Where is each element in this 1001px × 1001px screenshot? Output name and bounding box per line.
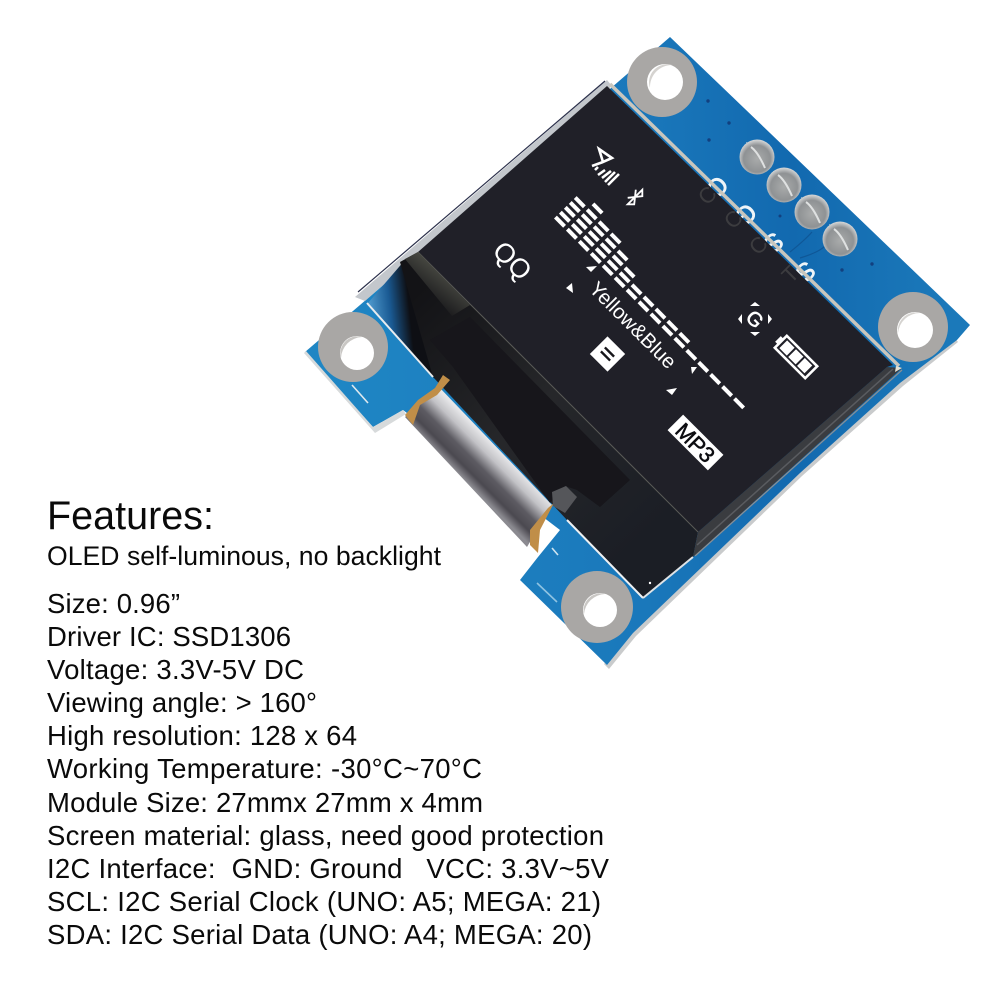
glass panel [355,80,902,598]
metal cylinder [405,375,577,553]
screen content [487,149,817,472]
heading: Features: Features: [47,494,214,538]
specification list: SDA: I2C Serial Data (UNO: A4; MEGA: 20) [47,919,592,950]
specification list: SCL: I2C Serial Clock (UNO: A5; MEGA: 21) [47,886,601,917]
mounting hole: bottom [561,571,633,643]
specification list: Working Temperature: -30°C~70°C [47,753,482,784]
icon: bluetooth [624,186,646,208]
specification list [47,588,610,950]
specification list: High resolution: 128 x 64 [47,720,357,751]
corner marks around title [566,266,697,395]
specification list: I2C Interface: GND: Ground VCC: 3.3V~5V [47,853,610,884]
MP3 badge: MP3 [670,418,720,468]
specification list: Screen material: glass, need good protection [47,820,604,851]
QQ label: QQ [487,235,538,286]
mounting hole: right [878,292,948,362]
subheading: OLED self-luminous, no backlight [47,541,442,571]
board pin labels: S [789,255,821,287]
specification list: Size: 0.96” [47,588,180,619]
board pin labels: G [729,198,762,231]
reflected pin labels on glass: C [693,181,722,210]
icon: battery [772,333,817,378]
board pin labels: C [701,170,734,203]
flex cable block [430,317,630,507]
reflected pin labels on glass [693,181,804,288]
icon: G badge: G [741,306,768,333]
icon: pause [590,336,625,372]
board pin labels: S [757,226,789,258]
reflected pin labels on glass: C [744,231,773,260]
header pin solder joints [740,140,858,256]
equalizer bars [554,190,771,409]
photo: OLED display module [304,37,970,669]
mounting hole: left [318,312,388,382]
mounting hole: top [627,47,697,117]
board pin labels [701,170,821,287]
specification list: Driver IC: SSD1306 [47,621,291,652]
specification list: Module Size: 27mmx 27mm x 4mm [47,787,483,818]
icon: signal antenna [592,149,619,185]
reflected pin labels on glass: T [777,261,804,288]
reflected pin labels on glass: C [719,205,748,234]
specification list: Voltage: 3.3V-5V DC [47,654,304,685]
Yellow&Blue label: Yellow&Blue [584,277,681,374]
icon: G badge [738,302,772,336]
specification list: Viewing angle: > 160° [47,687,317,718]
circuit board [304,37,970,669]
